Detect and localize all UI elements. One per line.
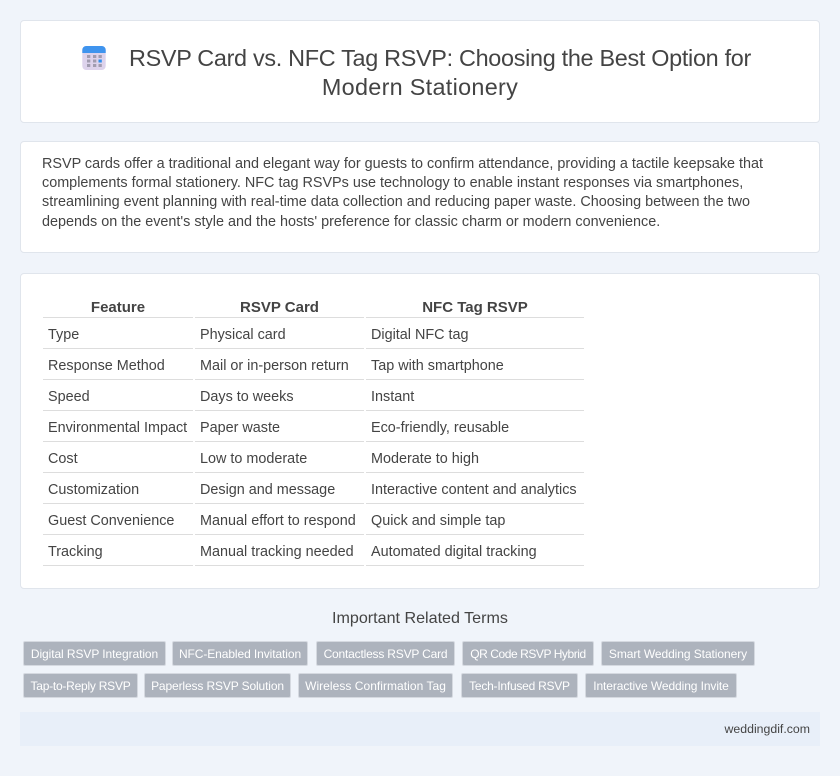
table row: speed: Days to weeks [200,389,294,405]
table row: type: Type [48,327,79,343]
panel: introduction [20,141,820,253]
table row: guest convenience: Guest Convenience [48,513,174,529]
text block: introduction: streamlining event planning with real-time data collection and reducing paper waste. Choosing between the two [42,194,750,210]
table row: customization: Interactive content and analytics [371,482,577,498]
table row: cost: Cost [48,451,78,467]
tag: Smart Wedding Stationery [609,647,747,661]
footer text: weddingdif.com [725,722,810,736]
tag: Contactless RSVP Card [324,647,447,661]
tag: QR Code RSVP Hybrid [470,647,586,661]
heading: important related terms: Important Related Terms [332,609,508,627]
table row: type [48,327,469,343]
tag: Interactive Wedding Invite [593,679,729,693]
tag [461,673,578,698]
panel: comparison table [20,273,820,589]
table row: customization [48,482,577,498]
panel: header [20,20,820,123]
table row: response method: Tap with smartphone [371,358,504,374]
table row: cost: Moderate to high [371,451,479,467]
table row: tracking: Tracking [48,544,103,560]
tag [172,641,308,666]
tag: Wireless Confirmation Tag [305,679,446,693]
table row: speed: Speed [48,389,90,405]
tag [23,673,138,698]
tag [23,641,166,666]
table row: customization: Customization [48,482,139,498]
text block: introduction: RSVP cards offer a traditional and elegant way for guests to confirm attendance, providing a tactile keepsake that [42,156,763,172]
tag [462,641,594,666]
table header: NFC Tag RSVP [422,299,528,316]
title: Modern Stationery [322,74,518,100]
tag [585,673,737,698]
table row: type: Physical card [200,327,286,343]
table row: tracking: Automated digital tracking [371,544,537,560]
tag [601,641,755,666]
tag: Digital RSVP Integration [31,647,158,661]
table row: guest convenience [48,513,505,529]
table header: Feature [91,299,145,316]
tag: Tech-Infused RSVP [469,679,570,693]
table row: speed [48,389,414,405]
text block: introduction [42,156,763,230]
icon: calendar [82,46,106,70]
table row: customization: Design and message [200,482,335,498]
table row: guest convenience: Manual effort to respond [200,513,356,529]
table row: environmental impact [48,420,509,436]
table row: cost: Low to moderate [200,451,307,467]
text block: introduction: depends on the event's style and the hosts' preference for classic charm or modern convenience. [42,214,660,230]
table row: tracking [48,544,537,560]
table row: response method [48,358,504,374]
table row: type: Digital NFC tag [371,327,469,343]
table row: environmental impact: Environmental Impact [48,420,187,436]
table header: RSVP Card [240,299,319,316]
tag: Paperless RSVP Solution [151,679,284,693]
tag: NFC-Enabled Invitation [179,647,301,661]
title: RSVP Card vs. NFC Tag RSVP: Choosing the Best Option for [129,45,751,71]
table row: speed: Instant [371,389,414,405]
tag [316,641,455,666]
table header [91,299,528,316]
tag [144,673,291,698]
table row: environmental impact: Paper waste [200,420,280,436]
title [129,45,751,100]
table row: response method: Mail or in-person return [200,358,349,374]
table row: tracking: Manual tracking needed [200,544,354,560]
tag group: related terms [23,641,755,698]
table row: guest convenience: Quick and simple tap [371,513,505,529]
table row: cost [48,451,479,467]
table row: response method: Response Method [48,358,165,374]
tag [298,673,453,698]
tag: Tap-to-Reply RSVP [31,679,130,693]
table row: environmental impact: Eco-friendly, reusable [371,420,509,436]
text block: introduction: complements formal stationery. NFC tag RSVPs use technology to enable instant responses via smartphones, [42,175,743,191]
footer [20,712,820,746]
